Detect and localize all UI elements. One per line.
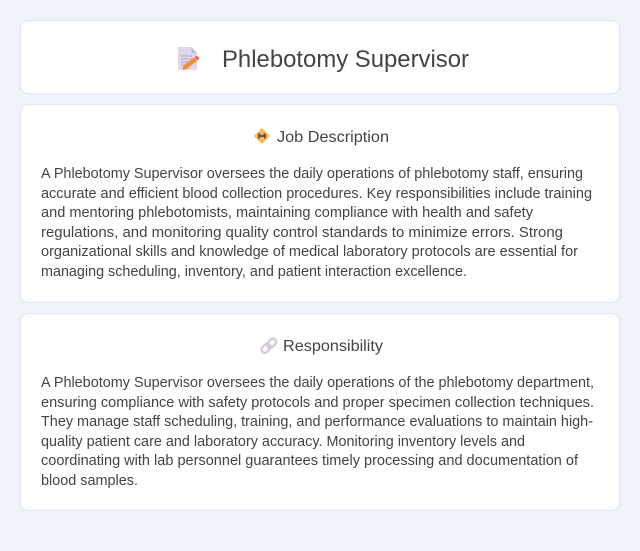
text block: responsibility: [41, 375, 594, 489]
text block: job description: organizational skills and knowledge of medical laboratory protocols are essential for: [41, 244, 578, 260]
text block: responsibility: coordinating with lab personnel guarantees timely processing and documentation of: [41, 453, 579, 469]
text block: responsibility: A Phlebotomy Supervisor oversees the daily operations of the phlebotomy department,: [41, 375, 594, 391]
text block: job description: [41, 166, 592, 280]
text block: job description: accurate and efficient blood collection procedures. Key responsibilities include training: [41, 186, 592, 202]
text block: responsibility: blood samples.: [41, 473, 138, 489]
icon: document with pencil: [178, 47, 200, 70]
text block: responsibility: They manage staff scheduling, training, and performance evaluations to maintain high-: [41, 414, 593, 430]
text block: job description: managing scheduling, inventory, and patient interaction excellence.: [41, 264, 467, 280]
text block: job description: and mentoring phlebotomists, maintaining compliance with health and safety: [41, 205, 534, 221]
icon: chain link: [260, 337, 277, 354]
icon: construction diamond: [255, 129, 269, 143]
text block: responsibility: quality patient care and laboratory accuracy. Monitoring inventory levels and: [41, 434, 525, 450]
text block: job description: regulations, and monitoring quality control standards to minimize errors. Strong: [41, 225, 563, 241]
panel: job description: [20, 104, 620, 302]
title: Phlebotomy Supervisor: [222, 46, 469, 73]
heading: responsibility: Responsibility: [283, 338, 383, 355]
panel: title card: [20, 20, 620, 94]
heading: job description: Job Description: [277, 129, 389, 146]
text block: job description: A Phlebotomy Supervisor oversees the daily operations of phlebotomy staff, ensuring: [41, 166, 583, 182]
text block: responsibility: ensuring compliance with safety protocols and proper specimen collection techniques.: [41, 395, 594, 411]
panel: responsibility: [20, 314, 620, 510]
